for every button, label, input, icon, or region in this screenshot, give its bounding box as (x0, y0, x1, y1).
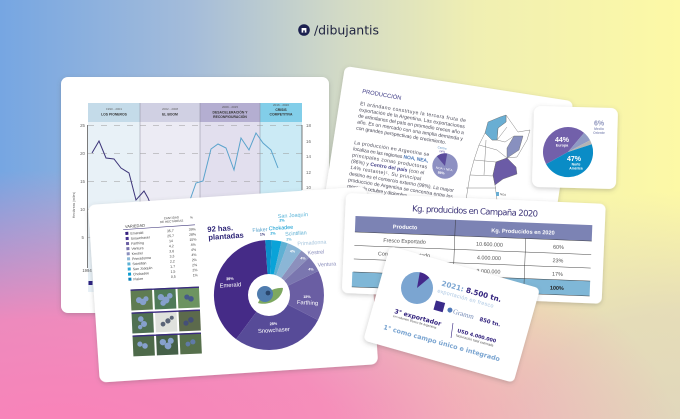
chart period headers: DESACELERACIÓN Y (213, 110, 248, 114)
varieties table (122, 214, 199, 282)
line chart: 20 (80, 151, 86, 156)
chart period headers: COMPETITIVA (270, 112, 293, 116)
data table: 17% (552, 272, 563, 278)
logo: Gramm 850 tn: Gramm (452, 308, 475, 321)
stat: USD revenue: USD 4.000.000 (456, 328, 497, 345)
paragraph: regions: producción de Argentina se concentra entre los (348, 177, 454, 200)
panel: export destinations pie card (532, 106, 618, 189)
donut chart: varieties: 4% (300, 256, 306, 260)
varieties table: % (190, 215, 193, 220)
paragraph: regions: localiza en las regiones NOA, NEA, (353, 146, 429, 164)
data table: 3.000.000 (476, 269, 501, 276)
varieties table: Primadonna (132, 256, 151, 261)
line chart: 10 (306, 185, 311, 190)
varieties table: Flaker (133, 277, 144, 281)
label: Medio Oriente: Oriente (593, 131, 605, 135)
small pie chart: regions: NOA + NEA (435, 166, 454, 172)
logo: dibujantis: /dibujantis (314, 22, 379, 38)
varieties table: Chokadee (133, 271, 149, 276)
donut chart: varieties (214, 240, 324, 350)
paragraph: regions: (86%) y Centro del país (con el (351, 159, 425, 176)
map legend: NOA (500, 192, 507, 197)
varieties table: 4% (191, 243, 196, 247)
donut outer labels: Primadonna (297, 240, 327, 247)
varieties table: 2% (192, 258, 197, 262)
logo: Gramm 850 tn: 850 tn. (479, 317, 501, 328)
varieties table: 2,2 (170, 259, 175, 264)
photo grid: blueberries (130, 287, 202, 356)
stat: 2021 export: exportación en fresco (437, 288, 494, 310)
map legend (496, 192, 507, 197)
varieties table: 0,5 (171, 275, 176, 279)
data table: 100% (550, 286, 564, 292)
line chart (72, 103, 311, 292)
varieties table: Ventura (131, 246, 144, 251)
stat: USD revenue: facturación total estimada (456, 333, 494, 348)
donut outer labels: 2% (279, 218, 285, 222)
donut chart: varieties: 4% (308, 268, 314, 272)
panel: export summary card (363, 246, 540, 383)
varieties table: VARIEDAD (125, 223, 145, 229)
paragraph: regions (347, 140, 460, 207)
varieties table: 1,5 (170, 270, 176, 274)
paragraph: introduction: de arándanos del país en promedio crecen año a (358, 113, 464, 136)
donut chart: varieties: 28% (270, 322, 278, 326)
small pie chart: regions: 86% (437, 171, 445, 176)
donut outer labels (252, 212, 336, 269)
varieties table: 1,7 (170, 264, 175, 269)
varieties table: 4% (191, 253, 197, 257)
paragraph: introduction: exportación de la Argentina. Las exportaciones (359, 107, 466, 130)
chart period headers: 2009 - 2015 (222, 105, 238, 109)
chart period headers (88, 103, 302, 122)
varieties table: CANTIDAD (164, 215, 180, 220)
varieties table: 14 (169, 239, 173, 243)
donut chart: varieties: 39% (226, 277, 234, 281)
varieties table: 4,2 (169, 244, 174, 248)
paragraph: regions: 14% restante)¹. Su principal (350, 165, 422, 182)
donut outer labels: Chokadee (269, 225, 293, 232)
line chart: 1994 (82, 268, 92, 273)
tagline: first as single integrated field: 1° como campo único e integrado (382, 323, 501, 363)
panel: kg producidos table card (342, 193, 606, 304)
data table: 10.600.000 (476, 242, 503, 249)
varieties table: 35,7 (167, 229, 174, 233)
line chart: 10 (80, 207, 86, 212)
donut chart: varieties: Farthing (297, 300, 318, 307)
donut outer labels: Kestrel (307, 249, 325, 257)
chart period headers: LOS PIONEROS (101, 112, 128, 116)
panel: line chart card (61, 77, 329, 313)
chart period headers: EL BOOM (162, 112, 178, 116)
stat: 3rd exporter: en volumen fresco de Argentina (393, 314, 437, 330)
varieties table: 2% (192, 268, 198, 272)
paragraph: regions: destino es el comercio externo (98%). La mayor (349, 171, 455, 194)
paragraph: regions: principales zonas productoras (352, 152, 428, 171)
donut outer labels: Scintillan (285, 230, 307, 238)
pie chart: destinations: Europa (556, 144, 569, 148)
label: Medio Oriente: Medio (594, 127, 604, 131)
varieties table: 4% (191, 248, 196, 252)
label: Medio Oriente (593, 120, 605, 135)
heading: 92 has. plantadas: 92 has. (207, 223, 233, 234)
small pie chart: regions (432, 145, 458, 179)
varieties table: 15% (189, 237, 197, 242)
donut chart: varieties: Snowchaser (258, 327, 290, 335)
varieties table: Kestrel (132, 251, 143, 256)
pie chart: destinations: América (569, 166, 583, 170)
varieties table: 25,7 (167, 234, 174, 238)
paragraph: introduction (356, 101, 467, 149)
paragraph: regions: La producción en Argentina se (354, 140, 430, 158)
logo: Gramm 850 tn (433, 300, 502, 328)
varieties table: 1% (193, 273, 198, 278)
label: Medio Oriente: 6% (594, 120, 605, 128)
chart period headers: CRISIS (275, 108, 287, 112)
table heading: Kg. producidos en Campaña 2020 (412, 204, 538, 220)
donut outer labels: Ventura (317, 261, 336, 269)
varieties table: Farthing (131, 241, 144, 246)
heading: producción: PRODUCCIÓN (362, 88, 402, 102)
icon: blueberry on leaf (257, 286, 283, 304)
line chart: 5 (82, 235, 85, 240)
stat: 2021 export: 2021: 8.500 tn. (440, 279, 503, 304)
data table: Kg. Producidos en 2020 (491, 228, 555, 237)
panel: varieties card (88, 187, 378, 383)
line chart: 15 (80, 179, 86, 184)
heading: 92 has. plantadas: plantadas (208, 231, 244, 242)
varieties table: Snowchaser (131, 235, 151, 241)
varieties table: 39% (189, 227, 196, 232)
data table: 4.000.000 (477, 255, 501, 262)
data table: Fresco Exportado (383, 238, 426, 246)
pie chart: fresh export share (401, 272, 433, 304)
pie chart: destinations (543, 127, 593, 177)
donut outer labels: San Joaquín (278, 212, 308, 220)
line chart: Hectáreas (miles) (72, 192, 76, 218)
donut outer labels: 2% (286, 238, 292, 242)
panel: producción text card (324, 66, 618, 240)
donut chart: varieties: 15% (303, 295, 311, 299)
varieties table: DE HECTÁREAS (160, 219, 183, 224)
varieties table: San Joaquín (133, 266, 153, 271)
data table: Producto (393, 224, 418, 231)
line chart: 14 (306, 154, 311, 159)
pie chart: destinations: 44% (555, 137, 570, 144)
map of Argentina (466, 115, 530, 200)
donut outer labels: Flaker (252, 227, 268, 234)
small pie chart: regions: Centro (437, 145, 447, 151)
heading: 92 has. plantadas (207, 223, 244, 242)
donut outer labels: 1% (260, 232, 266, 236)
stat: 3rd exporter: 3° exportador (393, 307, 443, 328)
donut outer labels: 2% (270, 232, 276, 236)
varieties table: 3,3 (169, 254, 175, 259)
varieties table: 3,6 (169, 249, 174, 254)
varieties table: Scintillan (132, 261, 147, 266)
pie chart: destinations: Norte (572, 162, 581, 166)
chart period headers: RECONFIGURACIÓN (213, 114, 247, 119)
chart period headers: 1990 - 2001 (106, 107, 122, 111)
line chart: 16 (306, 139, 311, 144)
varieties table: 28% (189, 232, 196, 237)
paragraph: introduction: año. Es un mercado con una amplia demanda y (357, 119, 464, 143)
chart period headers: 2002 - 2008 (162, 107, 178, 111)
small pie chart: regions: 14% (439, 149, 446, 154)
line chart: 18 (306, 123, 311, 128)
paragraph: introduction: con grandes perspectivas de crecimiento. (356, 126, 447, 146)
data table (352, 216, 592, 296)
varieties table: 2% (192, 263, 197, 267)
donut chart: varieties: 4% (290, 250, 296, 254)
line chart: 12 (306, 170, 311, 175)
chart period headers: 2016 - 2020 (273, 103, 289, 107)
data table: Congelado Exportado (378, 251, 430, 259)
line chart: 25 (80, 123, 86, 128)
varieties table: Emerald (130, 231, 144, 236)
data table: 23% (552, 258, 564, 265)
data table: 60% (553, 245, 564, 251)
paragraph: introduction: El arándano constituye la tercera fruta de (360, 101, 466, 124)
paragraph: regions: meses de octubre y diciembre. (347, 184, 409, 199)
donut chart: varieties: Emerald (219, 282, 241, 290)
pie chart: destinations: 47% (567, 156, 582, 163)
